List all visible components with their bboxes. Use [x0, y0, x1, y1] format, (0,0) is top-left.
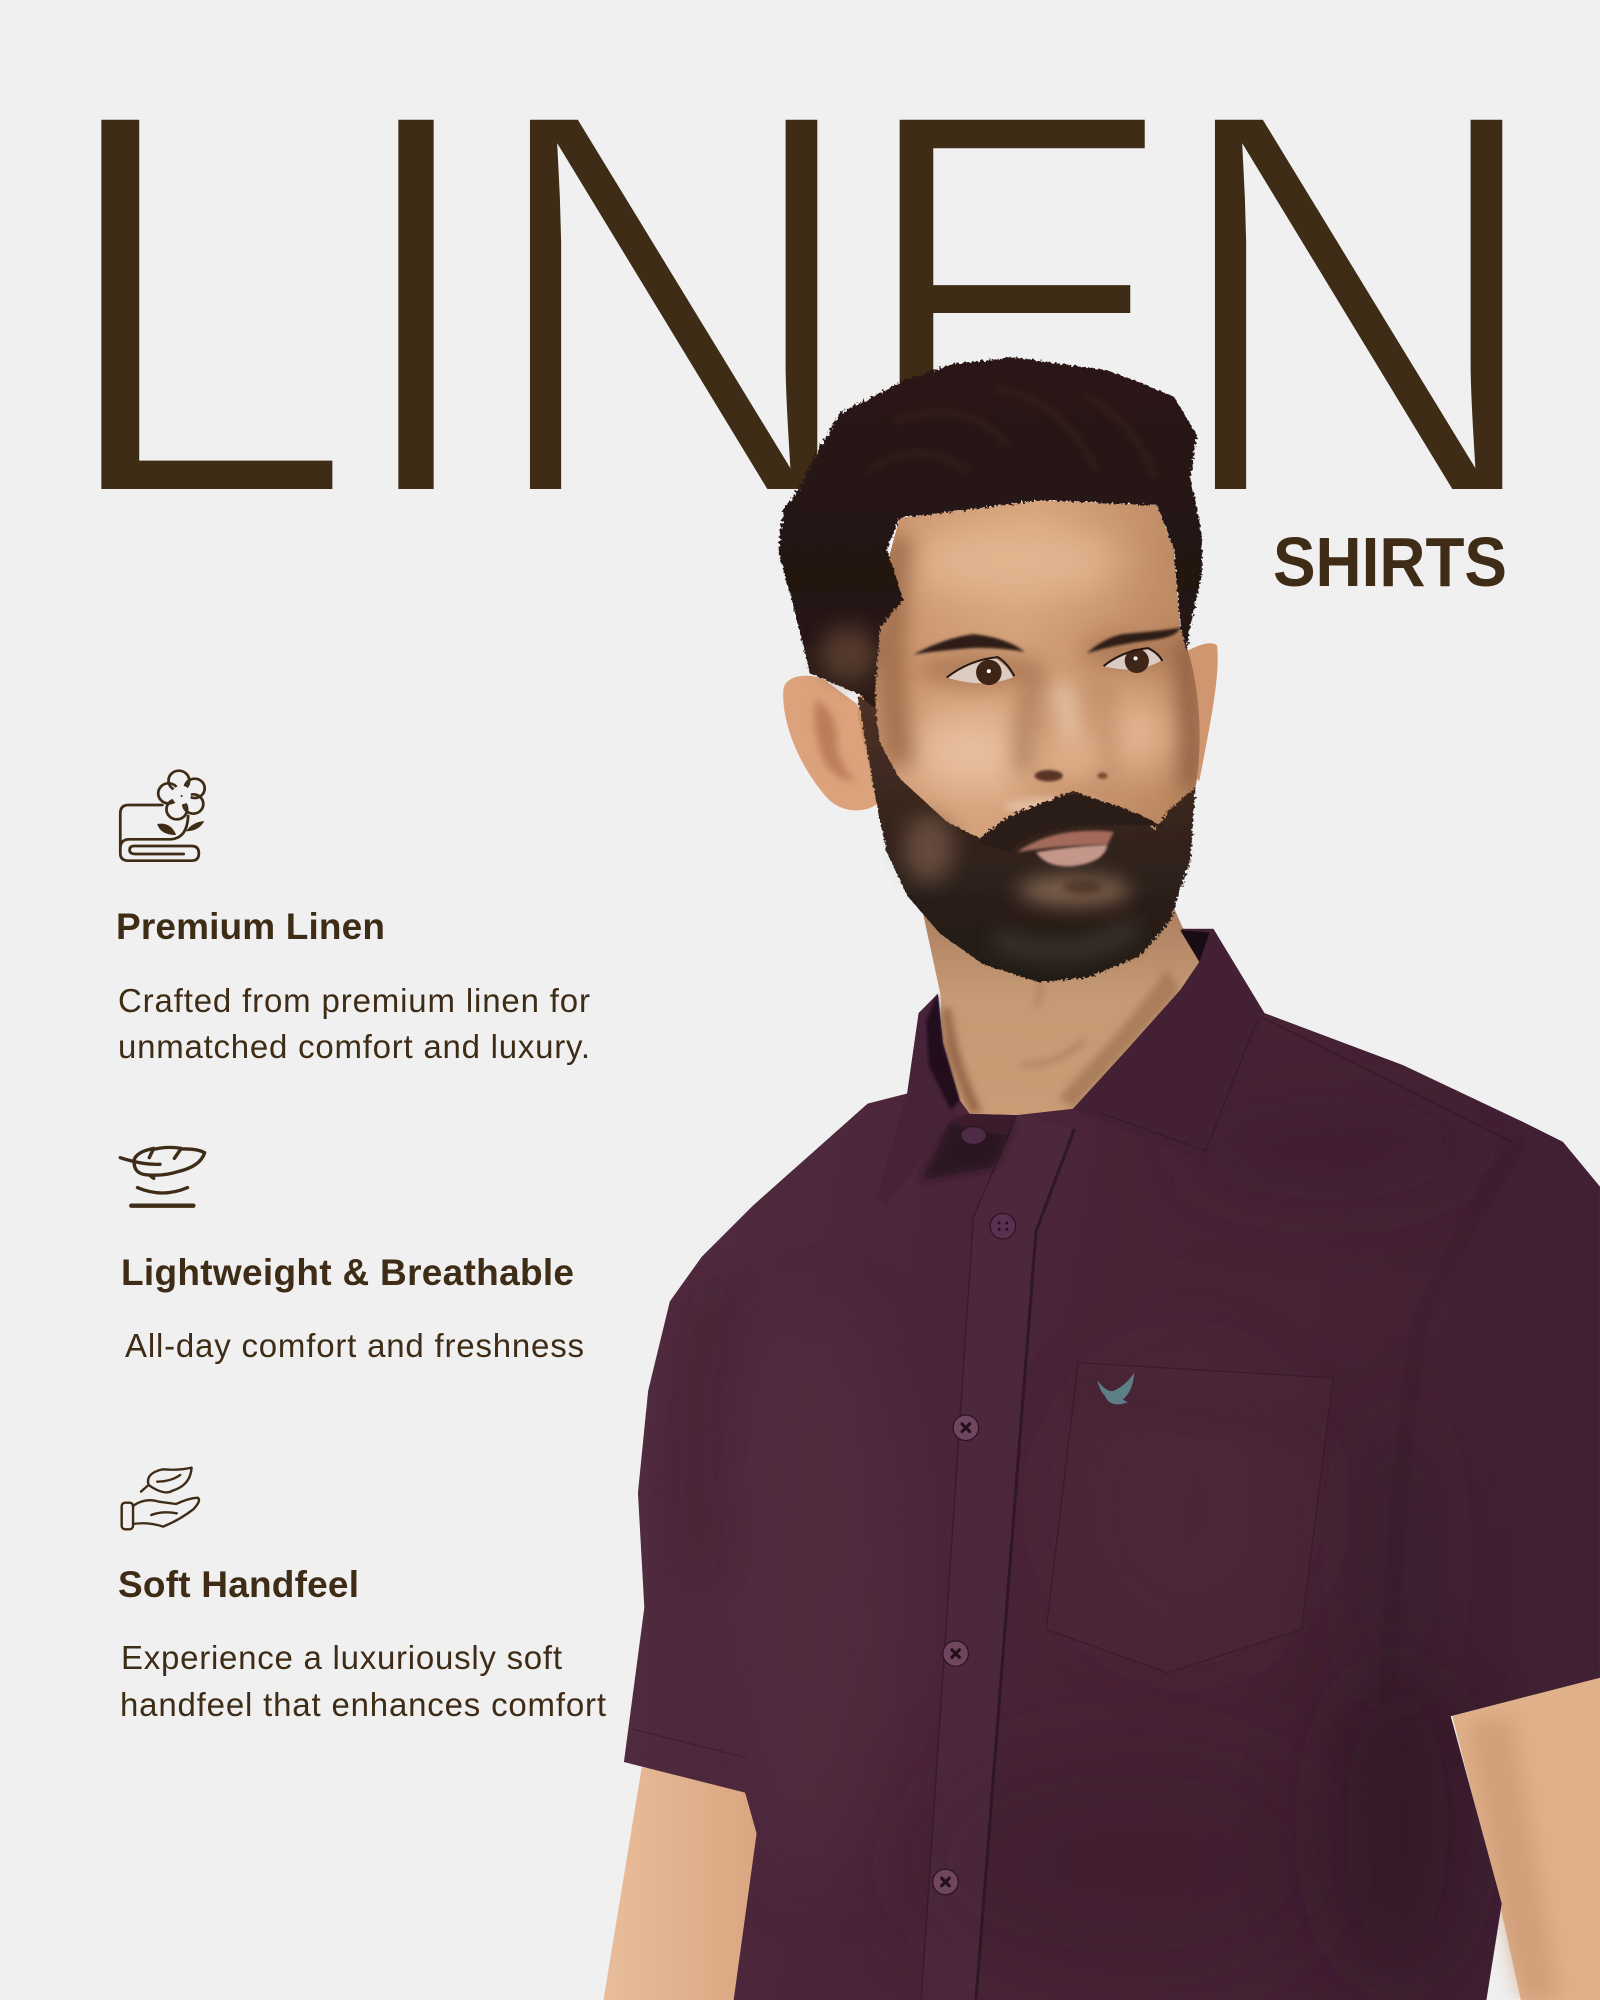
heading: Lightweight & Breathable: Lightweight & Breathable [121, 1252, 574, 1293]
button holes [942, 1223, 1007, 1886]
collar stand [951, 1114, 1017, 1136]
placket [921, 1115, 1074, 1999]
nose tip [1041, 737, 1102, 778]
inner collar wedge [1180, 930, 1210, 962]
left collar inner shade [926, 994, 959, 1110]
temple fade [820, 625, 877, 681]
left arm [604, 1767, 760, 2000]
placket edge [976, 1129, 1074, 1999]
title: LINEN: L [49, 0, 358, 615]
left ear [783, 676, 880, 810]
description: premium linen: unmatched comfort and luxury. [118, 1028, 590, 1065]
buttons [933, 1127, 1016, 1895]
cheek beard tone [903, 815, 954, 882]
under-collar shadow [921, 1120, 1014, 1180]
upper lip [1017, 831, 1114, 852]
face shading [891, 523, 1192, 815]
right eyebrow [1087, 628, 1180, 653]
neck [919, 893, 1202, 1123]
mustache [980, 794, 1164, 852]
feature: soft handfeel [118, 1468, 606, 1723]
description: lightweight: All-day comfort and freshness [125, 1327, 584, 1364]
shirt shading [696, 1097, 1480, 1990]
heading: Premium Linen: Premium Linen [116, 906, 385, 947]
description: soft handfeel: handfeel that enhances comfort [120, 1686, 606, 1723]
left ear inner [815, 699, 857, 781]
face [857, 500, 1200, 965]
beard grey tones [995, 925, 1136, 951]
title: LINEN: N [1164, 0, 1553, 615]
subtitle: SHIRTS: SHIRTS [1273, 523, 1507, 601]
collar stitching [1100, 1021, 1257, 1151]
right ear [1180, 643, 1218, 781]
title: LINEN: E [853, 0, 1182, 615]
photo: man in plum linen shirt [604, 357, 1600, 2000]
chin skin [1018, 875, 1130, 906]
placket stitching [921, 1115, 1017, 1999]
embroidered bird logo [1097, 1373, 1134, 1404]
hair [778, 357, 1202, 734]
icon: hand with leaf [122, 1468, 199, 1529]
right arm shading [1467, 1716, 1559, 1999]
description: premium linen: Crafted from premium linen for [118, 982, 590, 1019]
beard [857, 695, 1196, 982]
lower lip [1036, 845, 1107, 866]
nostril [1035, 770, 1063, 781]
right collar flap [1073, 929, 1264, 1165]
shirt body [624, 929, 1600, 2000]
sleeve seam [1387, 1143, 1518, 1707]
shoulder yoke seam [1263, 1018, 1512, 1142]
feature: premium linen [116, 771, 590, 1065]
title: LINEN: N [479, 0, 868, 615]
neck shadow by collar [1059, 970, 1180, 1109]
neck crease [1021, 982, 1085, 1065]
chest pocket [1046, 1363, 1333, 1673]
nostril right [1097, 773, 1107, 779]
soul patch [1063, 879, 1104, 894]
left eye [947, 657, 1014, 685]
left eyebrow [914, 634, 1025, 655]
neck side shadow [942, 1008, 982, 1113]
hair highlights [868, 389, 1155, 478]
pocket fold shade [1079, 1391, 1327, 1435]
title: LINEN: I [344, 0, 488, 615]
icon: towel with flower [120, 771, 205, 861]
heading: Soft Handfeel: Soft Handfeel [118, 1564, 359, 1605]
icon: feather [120, 1147, 205, 1206]
right eye [1104, 648, 1162, 673]
sleeve hem [632, 1729, 748, 1758]
description: soft handfeel: Experience a luxuriously soft [121, 1639, 562, 1676]
right arm [1451, 1671, 1600, 2000]
feature: lightweight and breathable [120, 1147, 584, 1364]
left collar flap [877, 994, 959, 1204]
